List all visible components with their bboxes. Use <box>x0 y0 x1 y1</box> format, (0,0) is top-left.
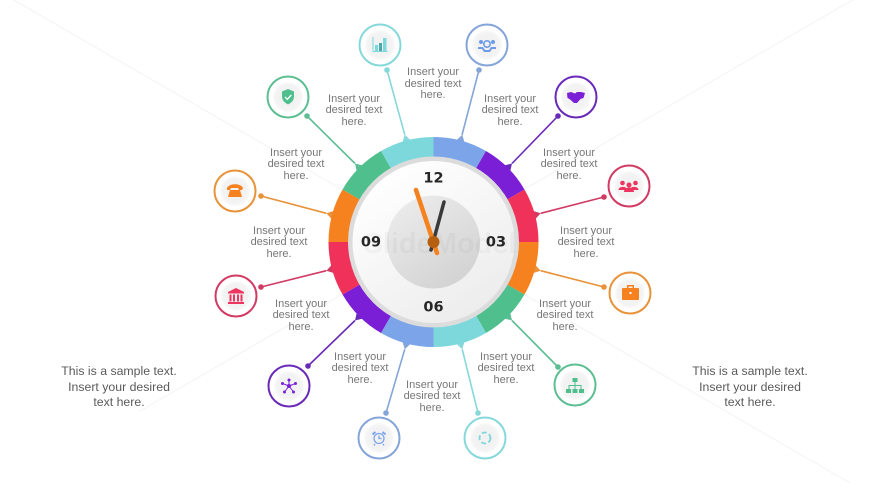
callout: left red <box>216 264 335 316</box>
clock face <box>348 156 519 328</box>
text: lower left 2: desired text <box>273 309 329 321</box>
text: lower right 1: Insert your <box>480 351 532 363</box>
text: lower right 1: here. <box>493 374 519 386</box>
icon: team <box>618 181 638 192</box>
callout: lower left purple <box>268 311 364 406</box>
callout: upper right purple <box>503 76 596 173</box>
numeral 06: 06 <box>423 300 444 316</box>
text: left: desired text <box>251 236 307 248</box>
sample text right: This is a sample text. <box>692 364 808 378</box>
text: lower right 2: here. <box>552 321 578 333</box>
callout: lower right green <box>503 311 596 406</box>
text: upper right 2: desired text <box>541 158 597 170</box>
text: lower right 2: Insert your <box>539 298 591 310</box>
text: top: desired text <box>405 78 461 90</box>
text: lower left 1: Insert your <box>334 351 386 363</box>
text: bottom: desired text <box>404 390 460 402</box>
text: top: here. <box>420 89 446 101</box>
icon: briefcase <box>622 285 639 300</box>
text: right: Insert your <box>560 225 612 237</box>
icon: telephone <box>227 184 243 197</box>
callout: top right blue <box>455 24 508 144</box>
callout: bottom left blue <box>358 340 412 458</box>
icon: network <box>282 379 296 393</box>
text: upper right 1: desired text <box>482 104 538 116</box>
text: upper right 2: Insert your <box>543 147 595 159</box>
text: upper left 1: here. <box>341 116 367 128</box>
text: top: Insert your <box>407 66 459 78</box>
sample text left: Insert your desired <box>68 380 170 394</box>
text: right: here. <box>573 248 599 260</box>
callout: right orange <box>532 264 650 314</box>
hub <box>428 236 440 248</box>
text: lower right 2: desired text <box>537 309 593 321</box>
text: upper left 2: desired text <box>268 158 324 170</box>
numeral 12: 12 <box>423 170 444 186</box>
text: upper right 1: here. <box>497 116 523 128</box>
callout: right red <box>532 166 650 220</box>
hand: hour <box>431 202 444 250</box>
watermark: SlideModel <box>363 228 517 260</box>
icon: handshake <box>567 92 585 103</box>
segmented ring <box>338 147 528 337</box>
connector <box>462 70 479 135</box>
callout: left orange <box>214 170 335 220</box>
hand: minute <box>416 190 437 253</box>
text: bottom: here. <box>419 402 445 414</box>
icon: org chart <box>566 378 584 393</box>
sample text right: text here. <box>724 395 776 409</box>
callout: upper left green <box>268 76 364 173</box>
text: upper left 1: Insert your <box>328 93 380 105</box>
text: upper left 2: here. <box>283 170 309 182</box>
sample text right: Insert your desired <box>699 380 801 394</box>
numeral 09: 09 <box>361 234 381 250</box>
icon: cycle <box>480 432 490 444</box>
text: upper left 2: Insert your <box>270 147 322 159</box>
text: upper right 2: here. <box>556 170 582 182</box>
icon: shield <box>282 89 294 104</box>
text: bottom: Insert your <box>406 379 458 391</box>
text: upper right 1: Insert your <box>484 93 536 105</box>
callout: bottom right teal <box>455 340 506 458</box>
text: lower left 1: desired text <box>332 362 388 374</box>
icon: people with target <box>478 40 496 52</box>
text: left: here. <box>266 248 292 260</box>
numeral 03: 03 <box>486 234 506 250</box>
text: upper left 1: desired text <box>326 104 382 116</box>
callout: top left teal <box>360 24 412 144</box>
icon: alarm clock <box>372 432 386 446</box>
text: lower right 1: desired text <box>478 362 534 374</box>
text: lower left 1: here. <box>347 374 373 386</box>
text: lower left 2: here. <box>288 321 314 333</box>
text: left: Insert your <box>253 225 305 237</box>
sample text left: text here. <box>93 395 145 409</box>
icon: bar chart <box>372 37 388 52</box>
icon: bank <box>228 288 244 304</box>
text: lower left 2: Insert your <box>275 298 327 310</box>
text: right: desired text <box>558 236 614 248</box>
sample text left: This is a sample text. <box>61 364 177 378</box>
